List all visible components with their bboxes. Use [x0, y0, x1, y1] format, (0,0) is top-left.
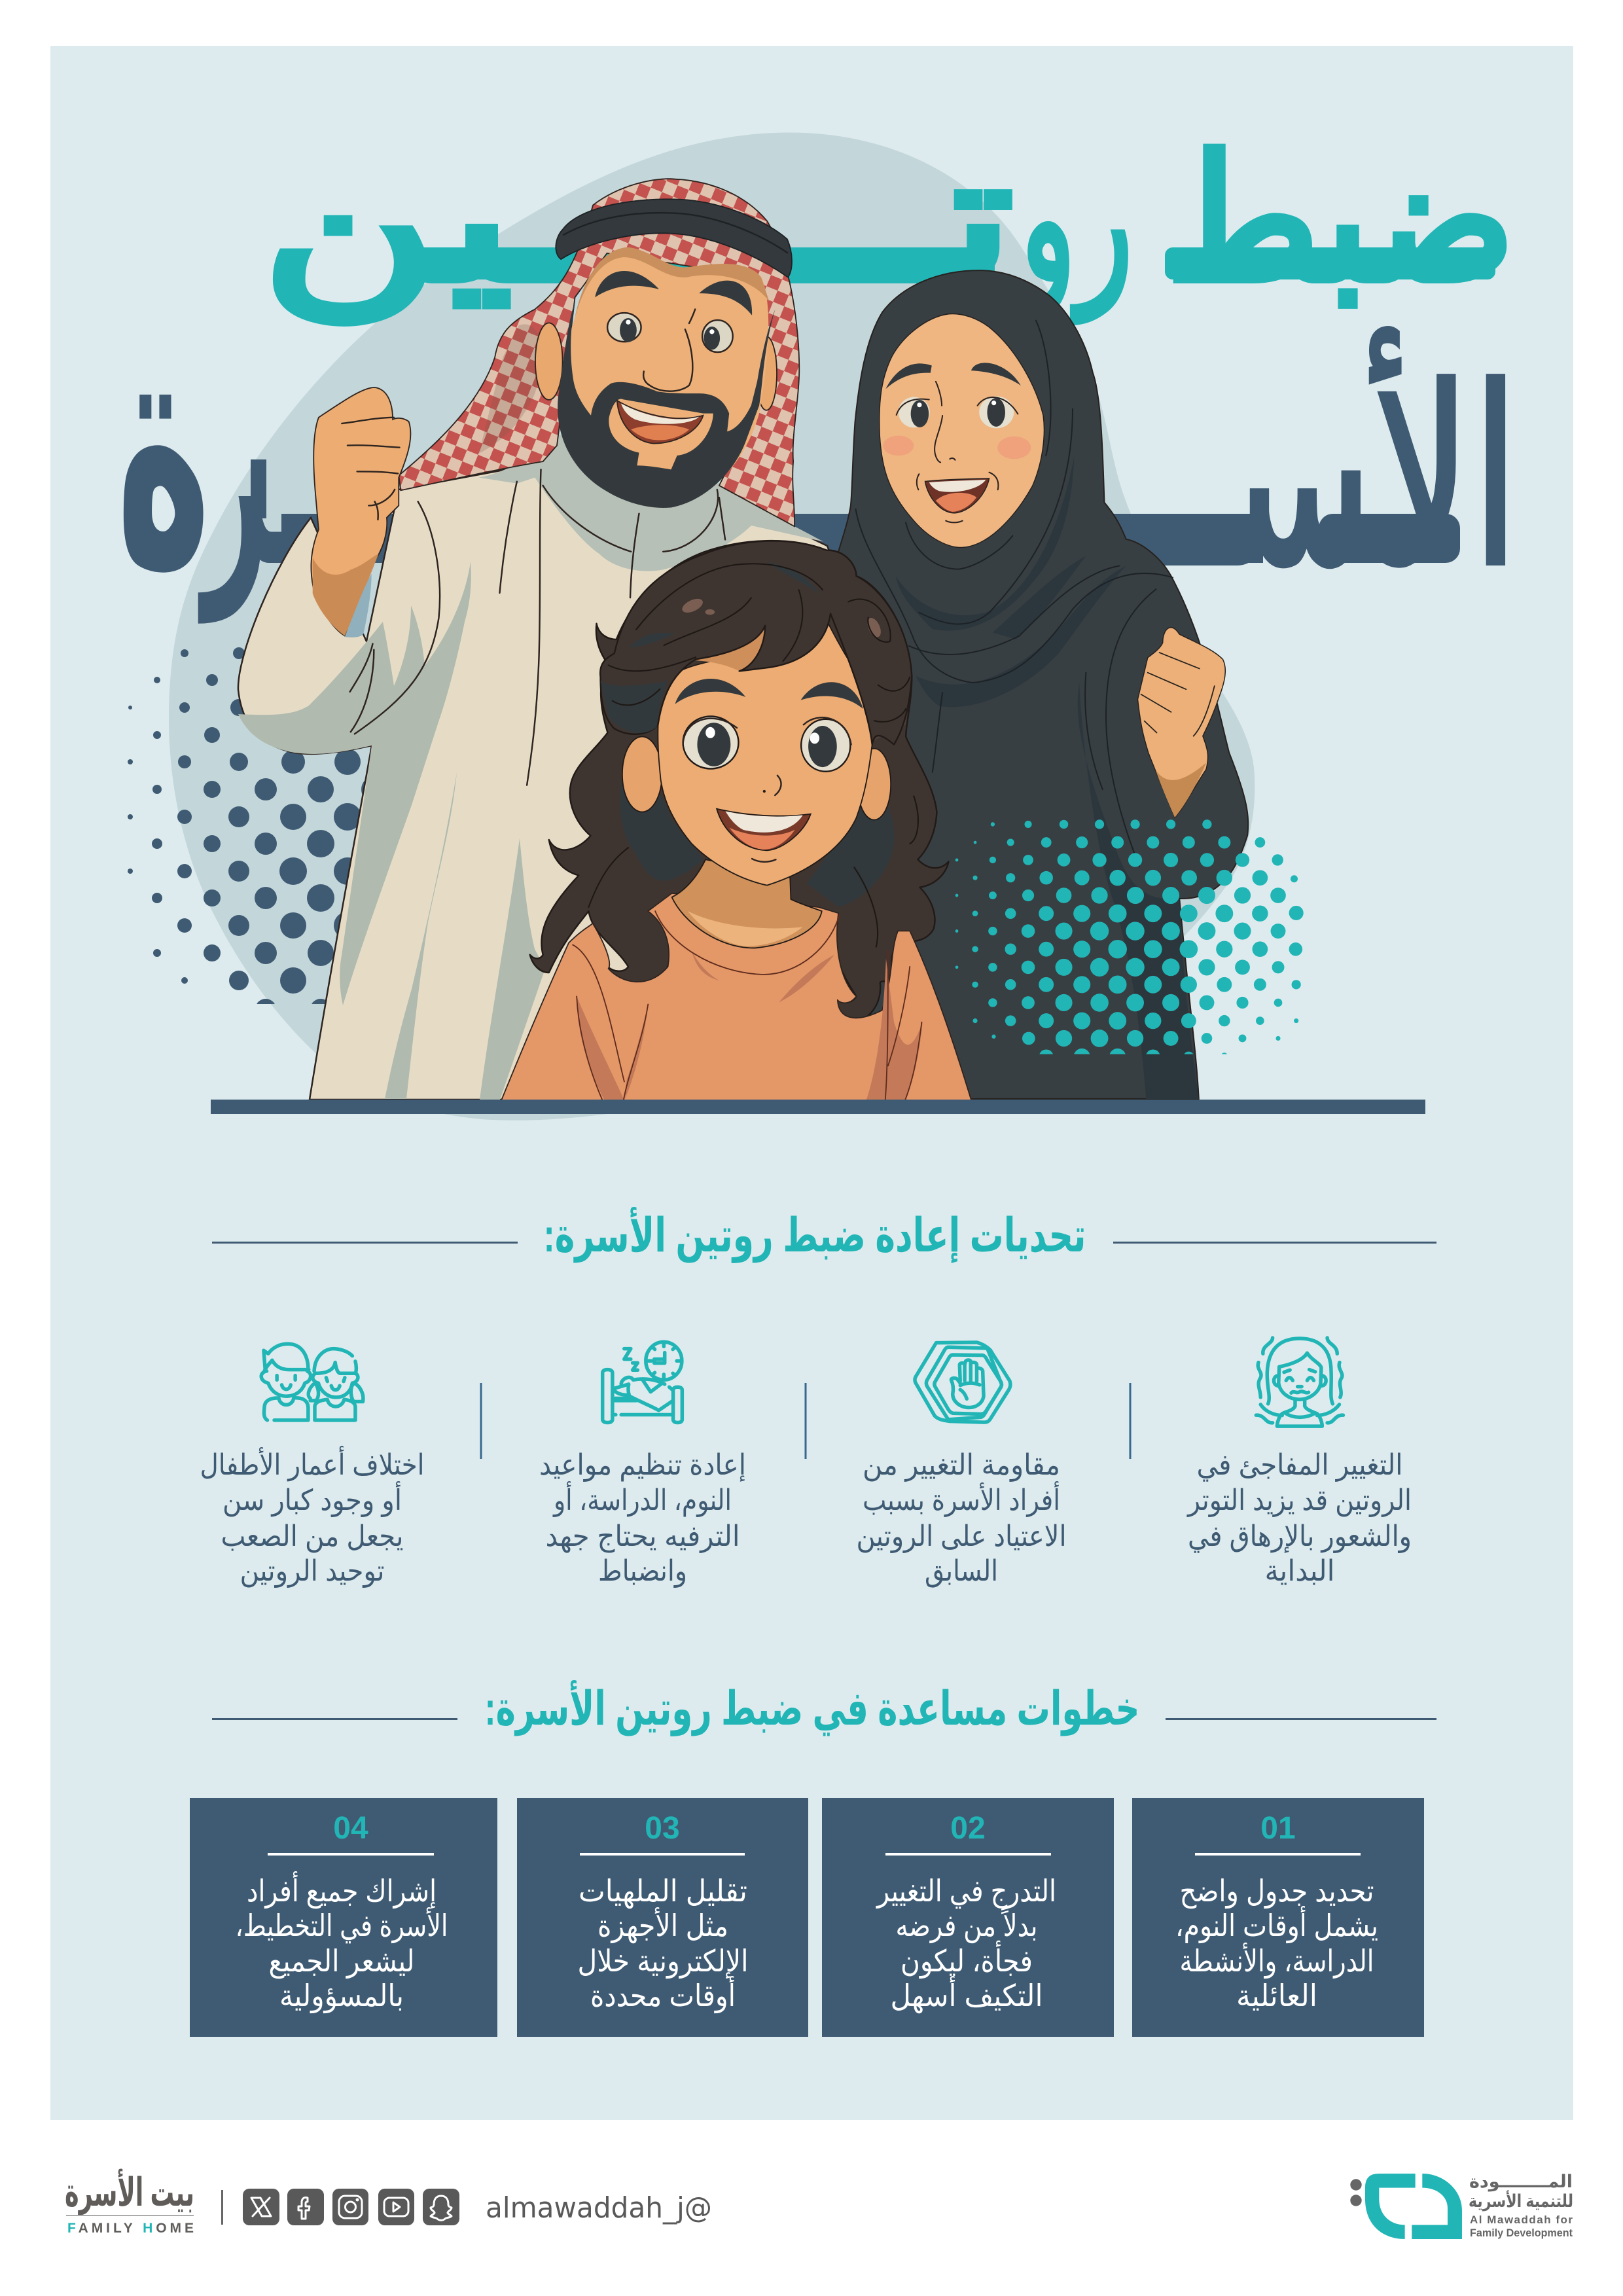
title line 2: [116, 266, 1520, 633]
illustration: family: [238, 179, 1248, 1100]
mouth: [717, 809, 811, 850]
navy halftone dots: [128, 647, 365, 1004]
icon: stressed woman: [1256, 1338, 1343, 1426]
card 02: 02: [950, 1811, 986, 1846]
card 02: فجأة، ليكون: [901, 1940, 1033, 1979]
ears: [622, 736, 662, 812]
eyes: [899, 397, 930, 427]
challenge 1: sudden change: [1186, 1338, 1412, 1587]
social icon: Snapchat: [423, 2189, 459, 2225]
collar: [350, 433, 823, 785]
card 01: [1132, 1798, 1424, 2037]
text: التغيير المفاجئ في: [1196, 1449, 1403, 1482]
abaya and hijab: [752, 270, 1248, 1099]
background blob: [169, 132, 1255, 1121]
social icon: Instagram: [332, 2189, 368, 2225]
text: [856, 1449, 1067, 1588]
card 04: 04: [333, 1811, 368, 1846]
text: [539, 1449, 746, 1588]
text: الترفيه يحتاج جهد: [546, 1520, 740, 1553]
card 04: إشراك جميع أفراد: [247, 1871, 437, 1909]
nose: [936, 382, 942, 406]
social icon: X: [243, 2189, 279, 2225]
icon: children: [261, 1344, 363, 1420]
logo dots: [1350, 2179, 1362, 2206]
card 02: التكيف أسهل: [890, 1976, 1043, 2013]
raised fist: [311, 387, 410, 636]
logo text: Family Development: [1470, 2227, 1573, 2239]
head and keffiyeh: [311, 179, 799, 637]
text: النوم، الدراسة، أو: [552, 1481, 732, 1517]
title line 1: ضبط: [1165, 123, 1516, 317]
face: [880, 314, 1044, 548]
text: اختلاف أعمار الأطفال: [200, 1446, 424, 1482]
card 01: الدراسة، والأنشطة: [1179, 1942, 1374, 1979]
footer: family home logo: FAMILY HOME: [67, 2221, 194, 2236]
icon: bed and clock: [603, 1342, 682, 1423]
skin below moustache: [609, 399, 713, 469]
hijab fold lines: [856, 321, 1173, 866]
title: [116, 120, 1520, 633]
card 03: الإلكترونية خلال: [577, 1944, 749, 1979]
ears: [535, 323, 563, 400]
heading: steps: خطوات مساعدة في ضبط روتين الأسرة:: [484, 1679, 1140, 1736]
social icon: YouTube: [378, 2189, 414, 2225]
divider 2: [805, 1383, 806, 1459]
figure: girl: [501, 541, 971, 1100]
card 02: بدلاً من فرضه: [895, 1907, 1038, 1944]
hijab folds shading: [896, 456, 1075, 631]
divider 1: [1130, 1383, 1131, 1459]
beard: [558, 301, 776, 508]
card 02: [822, 1798, 1114, 2037]
eyes: [607, 313, 641, 342]
hair dark lower layer: [620, 749, 704, 881]
divider 3: [480, 1383, 482, 1459]
heading: steps: [212, 1679, 1436, 1736]
neck: [672, 859, 822, 948]
logo text: للتنمية الأسرية: [1469, 2190, 1573, 2212]
text: [200, 1446, 424, 1588]
card 03: مثل الأجهزة: [597, 1907, 728, 1944]
hair top: [600, 541, 912, 745]
challenge 3: schedule: [539, 1342, 746, 1588]
footer: family home logo: بيت الأسرة: [65, 2168, 194, 2215]
challenge 4: age differences: [200, 1344, 424, 1588]
card 04: الأسرة في التخطيط،: [236, 1907, 448, 1944]
logo mark: [1365, 2174, 1462, 2239]
title line 2: ـر: [198, 338, 316, 625]
card 03: [517, 1798, 808, 2037]
mouth: [925, 478, 990, 513]
cheeks: [883, 436, 914, 456]
footer: Al Mawaddah logo: [1350, 2172, 1573, 2239]
card 04: بالمسؤولية: [279, 1979, 404, 2014]
sweater: [501, 893, 971, 1100]
thobe: [238, 461, 870, 1100]
text: أو وجود كبار سن: [223, 1481, 402, 1517]
card 04: ليشعر الجميع: [268, 1944, 415, 1979]
title line 2: ة: [116, 266, 211, 633]
challenge 2: resistance: [856, 1342, 1067, 1588]
raised fist: [1137, 628, 1225, 817]
thobe shadows: [238, 562, 471, 1005]
face: [561, 247, 768, 508]
text: توحيد الروتين: [240, 1555, 385, 1588]
eyebrows: [595, 271, 659, 297]
nose: [643, 329, 692, 391]
card 03: أوقات محددة: [590, 1976, 736, 2014]
text: السابق: [925, 1555, 998, 1588]
text: مقاومة التغيير من: [863, 1449, 1060, 1482]
eyes: [683, 717, 738, 769]
base bar: [211, 1100, 1425, 1114]
card 01: 01: [1260, 1811, 1296, 1846]
sweater folds: [577, 996, 624, 1100]
card 02: التدرج في التغيير: [876, 1874, 1056, 1909]
title line 1: تــــــين: [260, 120, 1016, 323]
text: أفراد الأسرة بسبب: [863, 1481, 1060, 1517]
mouth: [617, 401, 703, 444]
card 01: يشمل أوقات النوم،: [1175, 1906, 1378, 1944]
icon: stop hand: [915, 1342, 1010, 1422]
heading: challenges: تحديات إعادة ضبط روتين الأسرة:: [543, 1206, 1086, 1263]
card 03: 03: [645, 1811, 680, 1846]
footer: separator: [221, 2190, 223, 2225]
text: [1186, 1449, 1412, 1587]
figure: woman: [752, 270, 1248, 1099]
title line 1: رو: [1014, 120, 1133, 323]
text: إعادة تنظيم مواعيد: [539, 1449, 746, 1482]
text: الاعتياد على الروتين: [856, 1520, 1067, 1553]
card 03: تقليل الملهيات: [579, 1874, 747, 1909]
card 04: [190, 1798, 497, 2037]
teal halftone dots: [955, 819, 1304, 1065]
card 01: تحديد جدول واضح: [1179, 1874, 1374, 1909]
nose: [775, 776, 781, 795]
text: البداية: [1264, 1555, 1335, 1587]
text: وانضباط: [598, 1555, 687, 1588]
logo text: المــــــــودة: [1469, 2172, 1573, 2192]
title line 1: [260, 120, 1516, 323]
agal: [556, 199, 792, 278]
hair back: [530, 541, 949, 1022]
figure: man: [238, 179, 870, 1100]
text: الروتين قد يزيد التوتر: [1186, 1484, 1412, 1517]
logo text: Al Mawaddah for: [1470, 2214, 1573, 2226]
eyebrows: [675, 679, 745, 704]
card 01: العائلية: [1236, 1979, 1317, 2013]
eyebrows: [885, 363, 932, 389]
heading: challenges: [212, 1206, 1436, 1263]
social icon: Facebook: [287, 2189, 324, 2225]
logo text: [1469, 2172, 1573, 2239]
footer: social handle: almawaddah_j@: [486, 2191, 712, 2225]
footer: family home logo: [65, 2168, 194, 2236]
text: والشعور بالإرهاق في: [1188, 1520, 1412, 1553]
text: يجعل من الصعب: [221, 1520, 403, 1553]
face: [658, 616, 872, 886]
